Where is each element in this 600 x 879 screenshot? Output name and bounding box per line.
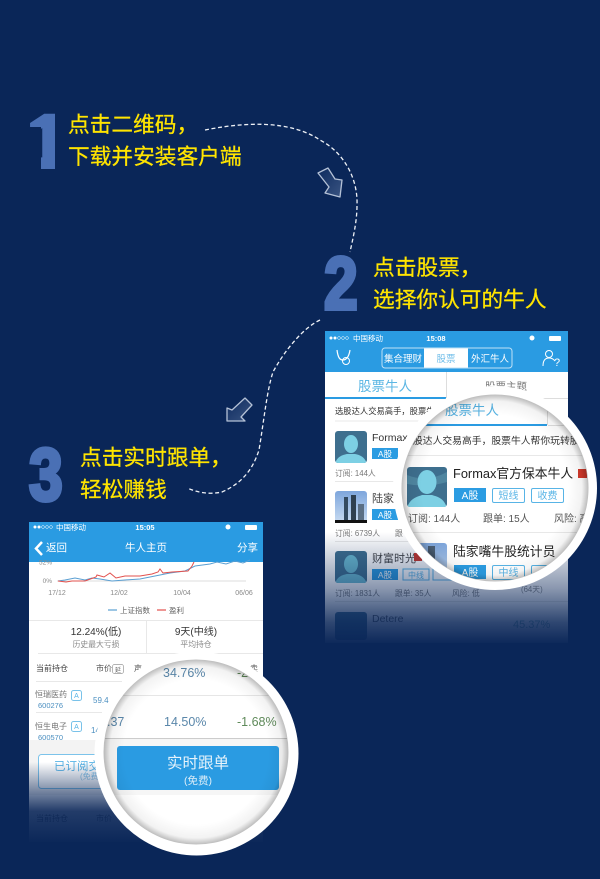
tabs: 股票主题 <box>485 381 527 393</box>
magnifier: expert card detail: 订阅: 144人 <box>408 512 460 525</box>
magnifier: follow button detail: -1.68% <box>237 715 277 729</box>
segmented control: 股票 <box>436 354 456 365</box>
bottom action bar <box>29 740 263 842</box>
tabs <box>325 372 568 399</box>
current holdings table: 市价 <box>96 663 112 673</box>
magnifier: expert card detail: 股票牛人 <box>445 403 499 418</box>
expert row 2: 订阅: 6739人 <box>335 528 380 538</box>
repeated holdings header: 市价 <box>96 813 112 823</box>
bottom action bar: 已订阅交 <box>54 759 100 773</box>
expert row 4: Detere <box>372 613 404 625</box>
current holdings table: 声 <box>134 663 142 673</box>
fade to background <box>325 532 568 645</box>
line chart: 10/04 <box>173 590 191 597</box>
expert row 3: A股 <box>378 570 393 580</box>
magnifier: expert card detail: 收费 <box>538 489 558 502</box>
status bar and navigation <box>325 331 568 372</box>
status bar and navigation: 15:08 <box>426 334 446 343</box>
step 3 heading: 轻松赚钱 <box>80 477 167 502</box>
current holdings table: A <box>74 693 79 700</box>
expert row 1: A股 <box>378 449 393 459</box>
step 2 number: 2 <box>324 243 358 325</box>
risk and holding stats: 9天(中线) <box>175 625 217 638</box>
expert row 1: 订阅: 144人 <box>335 468 376 478</box>
expert row 2 <box>335 491 403 538</box>
follow button: 实时跟单 <box>167 754 229 772</box>
expert row 2: 陆家 <box>372 491 394 505</box>
intro text: 选股达人交易高手，股票牛 <box>335 406 435 416</box>
status bar and navigation: 返回 <box>46 542 67 554</box>
current holdings table: 当前持仓 <box>36 663 68 673</box>
expert row 3: 中线 <box>408 570 424 580</box>
step 1 heading <box>68 112 242 169</box>
expert row 4: 45.37% <box>513 619 551 631</box>
magnifier: follow button detail: 14.50% <box>164 715 206 729</box>
phone screenshot: expert homepage <box>29 522 263 844</box>
step 1 heading: 下载并安装客户端 <box>68 144 242 169</box>
follow button <box>117 746 279 790</box>
chart legend <box>108 605 184 615</box>
repeated holdings header: 当前持仓 <box>36 813 68 823</box>
step 1 heading: 点击二维码， <box>68 112 198 137</box>
magnifier: expert card detail: 风险: 高 <box>554 512 590 525</box>
current holdings table: A <box>74 724 79 731</box>
risk and holding stats: 历史最大亏损 <box>73 639 120 649</box>
risk and holding stats: 12.24%(低) <box>71 625 121 638</box>
follow button: (免费) <box>184 774 212 787</box>
expert row 3: (64天) <box>521 585 543 594</box>
current holdings table: 59.4 <box>93 696 109 705</box>
line chart: 0% <box>43 578 52 585</box>
arrow: step 1 to step 2 <box>318 168 342 197</box>
line chart <box>39 560 253 615</box>
expert row 2: A股 <box>378 510 393 520</box>
expert row 3 <box>335 551 543 598</box>
current holdings table: 卖 <box>250 664 258 673</box>
chart legend: 盈利 <box>169 605 184 615</box>
expert row 3: 风险: 低 <box>452 588 480 598</box>
expert row 1 <box>335 431 408 478</box>
arrow: step 2 to step 3 <box>227 398 252 421</box>
expert row 1: Formax <box>372 432 408 444</box>
magnifier: follow button detail: .37 <box>107 715 124 729</box>
magnifier: expert card detail: A股 <box>462 567 478 579</box>
status bar and navigation: 中国移动 <box>56 522 86 532</box>
expert row 4 <box>335 612 551 640</box>
segmented control: 外汇牛人 <box>471 353 509 365</box>
step 3 number: 3 <box>29 434 63 516</box>
magnifier: follow button detail: -2.1 <box>237 666 259 680</box>
step 3 heading: 点击实时跟单， <box>80 445 232 470</box>
status bar and navigation: 15:05 <box>135 523 155 532</box>
step 3 heading <box>80 445 232 502</box>
magnifier: follow button detail <box>94 652 298 856</box>
current holdings table: 600276 <box>38 701 63 710</box>
magnifier: expert card detail <box>393 386 597 590</box>
chart legend: 上证指数 <box>120 605 150 615</box>
step 2 heading <box>373 255 547 312</box>
dashed path from step 1 to step 2 <box>205 124 357 252</box>
magnifier: expert card detail: 跟单: 15人 <box>483 513 530 525</box>
status bar and navigation: 中国移动 <box>353 333 383 343</box>
risk and holding stats <box>71 621 217 653</box>
step 1 number: 1 <box>27 100 68 183</box>
current holdings table: 600570 <box>38 733 63 742</box>
current holdings table: 延 <box>115 666 121 674</box>
current holdings table: 恒生电子 <box>35 721 67 731</box>
status bar and navigation: 分享 <box>237 541 258 554</box>
segmented control <box>382 348 512 368</box>
expert row 3: 订阅: 1831人 <box>335 588 380 598</box>
repeated holdings header <box>29 795 263 842</box>
expert row 3: 财富时光 <box>372 551 416 565</box>
status bar and navigation: ? <box>554 357 560 369</box>
step 2 heading: 点击股票， <box>373 255 481 280</box>
line chart: 06/06 <box>235 590 253 597</box>
current holdings table <box>35 663 258 742</box>
magnifier: expert card detail: A股 <box>462 490 478 502</box>
fade to background <box>29 762 263 844</box>
expert row 3: 跟单: 35人 <box>395 588 432 598</box>
current holdings table: 14 <box>91 726 100 735</box>
current holdings table: 恒瑞医药 <box>35 689 67 699</box>
magnifier: expert card detail: 中线 <box>498 566 518 579</box>
magnifier: follow button detail: 34.76% <box>163 666 205 680</box>
dashed path from step 2 to step 3 <box>187 320 320 493</box>
line chart: 12/02 <box>110 590 128 597</box>
magnifier: expert card detail: 股达人交易高手，股票牛人帮你玩转股 <box>413 434 580 447</box>
line chart: 17/12 <box>48 590 66 597</box>
tabs: 股票牛人 <box>358 379 412 394</box>
expert row 2: 跟 <box>395 529 403 538</box>
magnifier: expert card detail: Formax官方保本牛人 <box>453 466 573 481</box>
magnifier: expert card detail: 短线 <box>498 489 518 502</box>
line chart: 52% <box>39 560 52 566</box>
status bar and navigation <box>29 522 263 562</box>
status bar and navigation: 牛人主页 <box>125 541 167 554</box>
bottom action bar: (免费) <box>80 771 102 781</box>
phone screenshot: stock experts list <box>325 331 568 645</box>
segmented control: 集合理财 <box>384 353 422 365</box>
magnifier: expert card detail: 陆家嘴牛股统计员 <box>453 544 555 559</box>
risk and holding stats: 平均持仓 <box>180 639 212 649</box>
step 2 heading: 选择你认可的牛人 <box>373 287 547 312</box>
